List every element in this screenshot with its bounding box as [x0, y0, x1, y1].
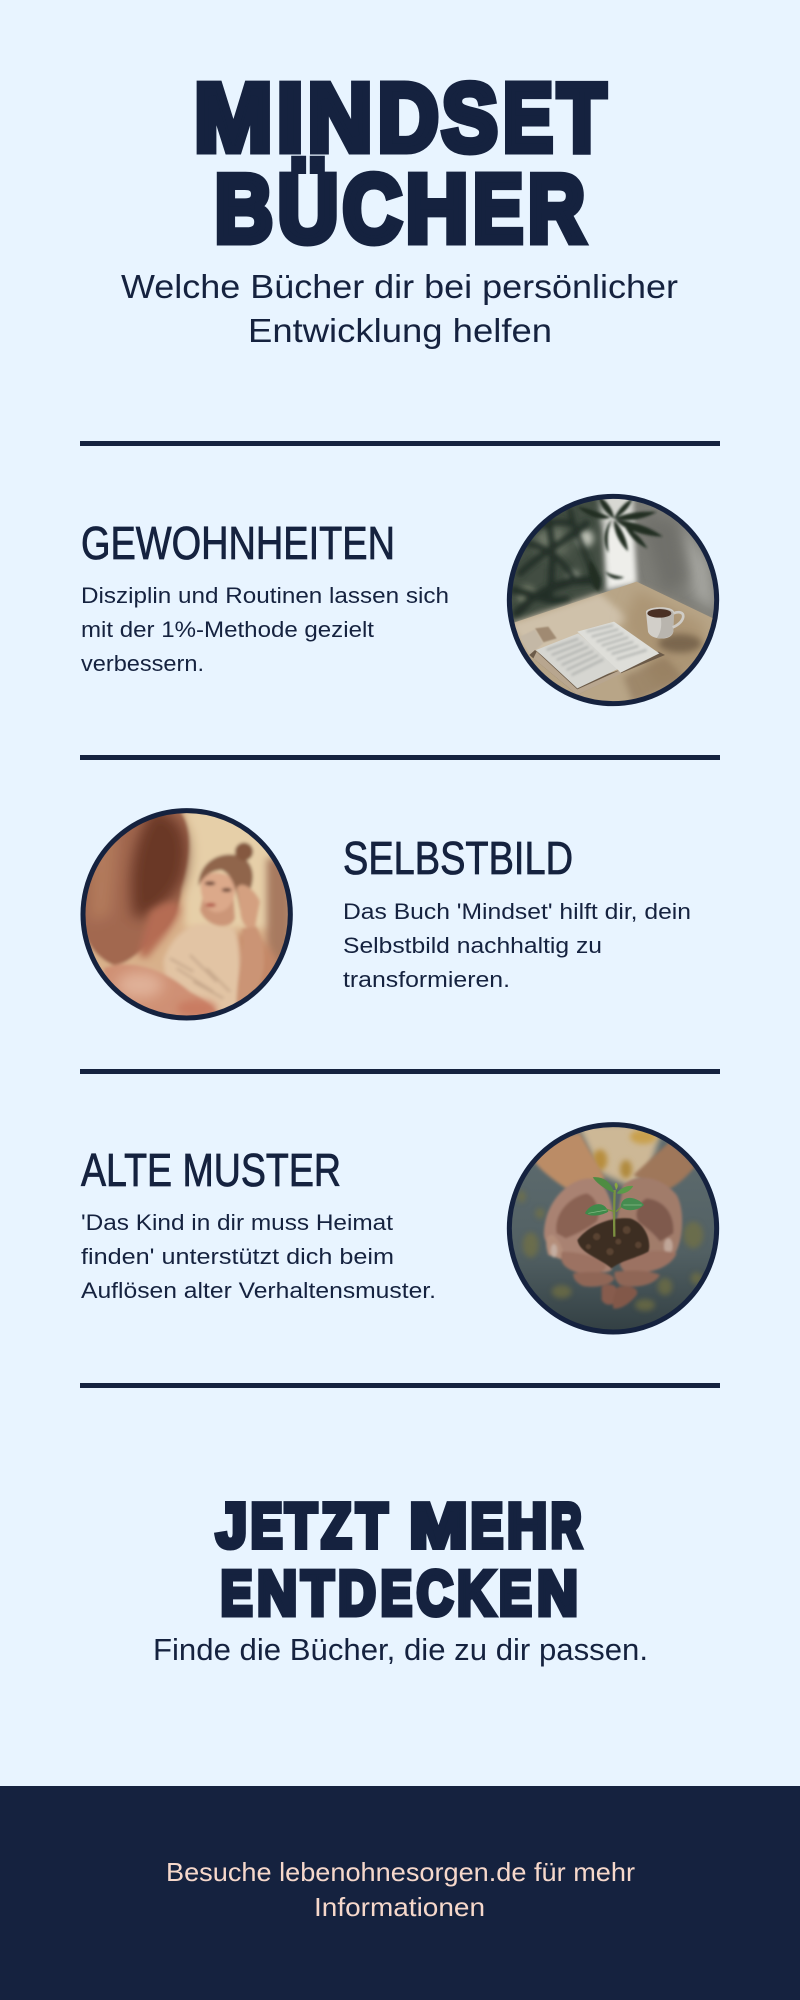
panel: Gewohnheiten: [81, 490, 723, 713]
title: R: [528, 156, 585, 263]
heading: Jetzt mehr entdecken: T: [302, 1560, 334, 1629]
panel: Selbstbild: [77, 805, 691, 1028]
heading: Jetzt mehr entdecken: T: [285, 1492, 317, 1561]
title: E: [473, 156, 523, 263]
title: N: [308, 64, 372, 171]
title: H: [406, 156, 468, 263]
heading: Jetzt mehr entdecken: K: [457, 1560, 495, 1629]
header: [121, 64, 678, 349]
heading: Jetzt mehr entdecken: N: [257, 1560, 297, 1629]
title: T: [558, 64, 606, 171]
title: E: [503, 64, 553, 171]
image: cupped hands holding a seedling: [503, 1120, 723, 1340]
subtitle: [121, 268, 678, 349]
subtitle: Welche Bücher dir bei persönlicher: [121, 268, 678, 305]
subtitle: Entwicklung helfen: [248, 312, 552, 349]
text block: Gewohnheiten: [81, 583, 449, 676]
text block: Gewohnheiten: mit der 1%-Methode gezielt: [81, 617, 375, 642]
text block: Gewohnheiten: verbessern.: [81, 651, 204, 676]
text block: Selbstbild: [343, 899, 691, 992]
footer: [0, 1786, 800, 2000]
image: open book and coffee on a table: [500, 490, 723, 713]
footer text: [166, 1857, 635, 1922]
text block: Selbstbild: Selbstbild nachhaltig zu: [343, 933, 602, 958]
heading: Jetzt mehr entdecken: R: [551, 1492, 582, 1561]
panel: Alte Muster: [81, 1120, 723, 1340]
title: D: [378, 64, 439, 171]
footer text: Besuche lebenohnesorgen.de für mehr: [166, 1857, 635, 1887]
text block: Alte Muster: Auflösen alter Verhaltensmuster.: [81, 1278, 436, 1303]
heading: Jetzt mehr entdecken: E: [381, 1560, 412, 1629]
text block: Alte Muster: 'Das Kind in dir muss Heimat: [81, 1210, 394, 1235]
title: [194, 64, 606, 263]
title: I: [277, 64, 303, 171]
title: S: [442, 64, 498, 171]
heading: Jetzt mehr entdecken: N: [537, 1560, 578, 1629]
heading: Alte Muster: ALTE MUSTER: [81, 1144, 341, 1196]
title: M: [194, 64, 272, 171]
footer panel: [0, 1786, 800, 2000]
title: C: [343, 156, 402, 263]
heading: Jetzt mehr entdecken: T: [356, 1492, 388, 1561]
heading: Selbstbild: SELBSTBILD: [343, 832, 573, 884]
call to action: [153, 1492, 648, 1667]
heading: Jetzt mehr entdecken: E: [471, 1492, 503, 1561]
heading: Jetzt mehr entdecken: E: [251, 1492, 282, 1561]
heading: Gewohnheiten: GEWOHNHEITEN: [81, 517, 395, 569]
heading: Jetzt mehr entdecken: D: [338, 1560, 376, 1629]
heading: Jetzt mehr entdecken: [216, 1492, 582, 1629]
text block: Gewohnheiten: Disziplin und Routinen lassen sich: [81, 583, 449, 608]
heading: Jetzt mehr entdecken: E: [499, 1560, 532, 1629]
footer text: Informationen: [314, 1892, 485, 1922]
text block: Selbstbild: transformieren.: [343, 967, 510, 992]
text block: Alte Muster: [81, 1210, 436, 1303]
heading: Jetzt mehr entdecken: M: [410, 1492, 467, 1561]
heading: Jetzt mehr entdecken: E: [221, 1560, 252, 1629]
text block: Alte Muster: finden' unterstützt dich beim: [81, 1244, 394, 1269]
heading: Jetzt mehr entdecken: C: [417, 1560, 453, 1629]
heading: Jetzt mehr entdecken: J: [216, 1492, 247, 1561]
image: woman looking in a mirror: [77, 805, 297, 1028]
title: B: [215, 156, 273, 263]
heading: Jetzt mehr entdecken: H: [507, 1492, 547, 1561]
title: Ü: [278, 156, 338, 263]
heading: Jetzt mehr entdecken: Z: [321, 1492, 351, 1561]
text block: Selbstbild: Das Buch 'Mindset' hilft dir, dein: [343, 899, 691, 924]
subheading: Finde die Bücher, die zu dir passen.: [153, 1632, 648, 1667]
